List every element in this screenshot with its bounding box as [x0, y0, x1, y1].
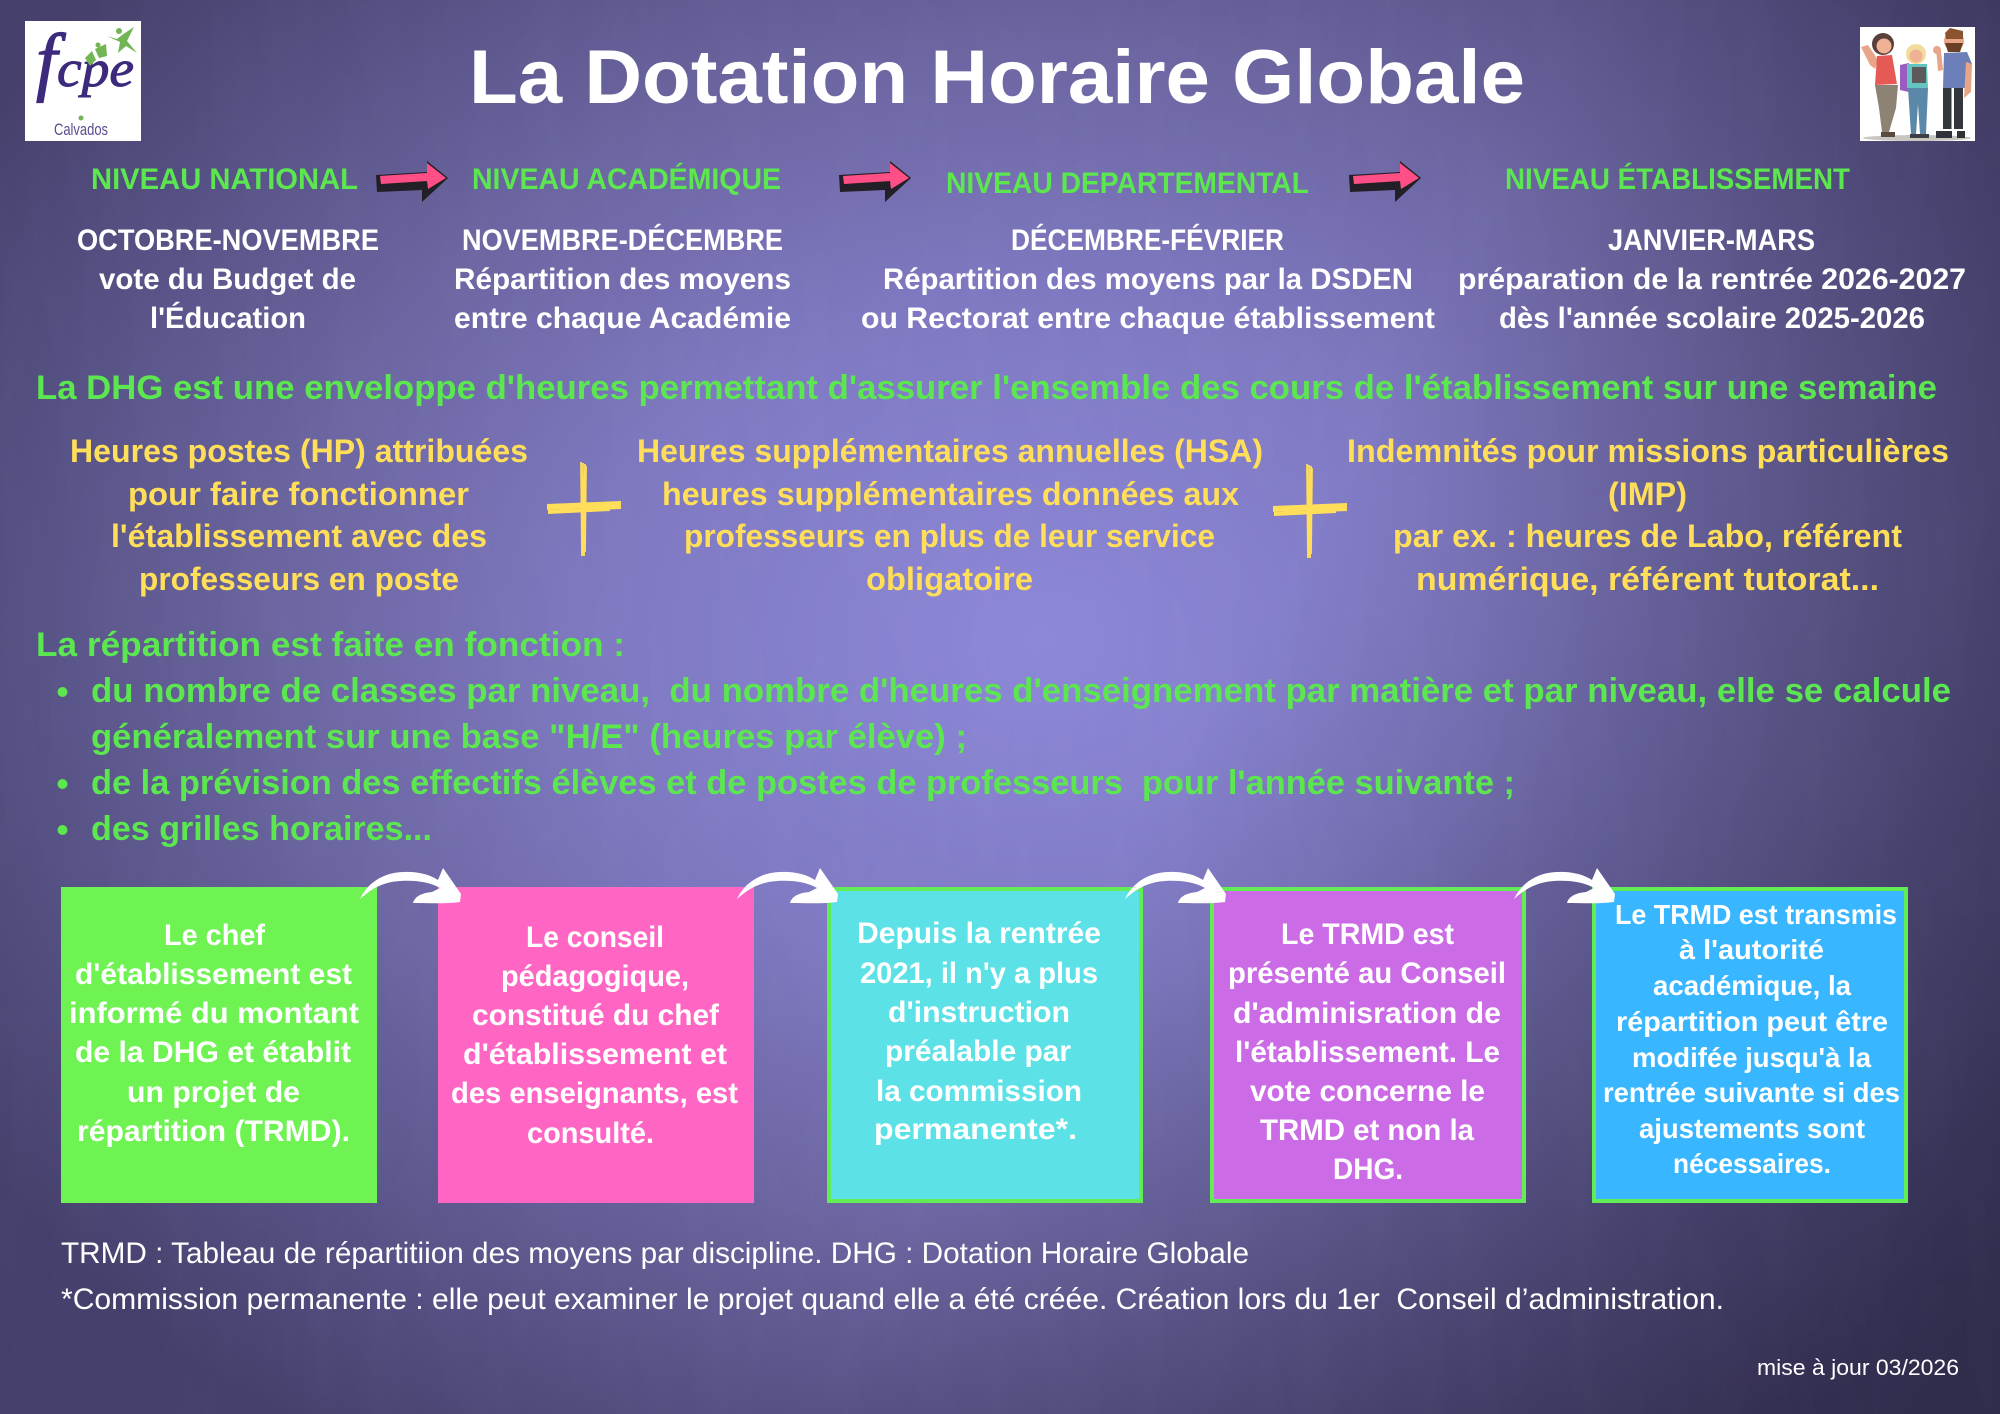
list heading: La répartition est faite en fonction :	[36, 626, 625, 664]
text block: national: OCTOBRE-NOVEMBRE	[77, 224, 379, 257]
panel: step 1 head of school: d'établissement est	[75, 958, 352, 991]
text block: departmental: Répartition des moyens par la DSDEN	[883, 263, 1413, 296]
bullet	[58, 779, 68, 789]
text block: heures postes: l'établissement avec des	[111, 518, 487, 554]
logo: fcpe Calvados	[25, 19, 141, 141]
panel: step 3 permanent commission: 2021, il n'y a plus	[860, 957, 1098, 990]
panel: timeline levels	[77, 161, 1966, 335]
panel: allocation criteria list	[36, 626, 1951, 848]
panel: step 4 administration council: TRMD et non la	[1260, 1114, 1474, 1147]
list item: forecast: de la prévision des effectifs élèves et de postes de professeurs pour l'année suivante ;	[91, 764, 1515, 802]
panel: step 3 permanent commission: d'instruction	[888, 996, 1070, 1029]
panel: step 1 head of school: informé du montant	[69, 997, 359, 1030]
text block: heures supplementaires	[637, 433, 1263, 597]
panel: step 3 permanent commission: Depuis la rentrée	[857, 917, 1101, 950]
text block: departmental: ou Rectorat entre chaque établissement	[861, 302, 1435, 335]
panel: step 4 administration council: DHG.	[1333, 1153, 1403, 1186]
list item: classes: généralement sur une base "H/E" (heures par élève) ;	[91, 718, 967, 756]
panel: step 2 pedagogical council: pédagogique,	[501, 960, 689, 993]
panel: step 2 pedagogical council: Le conseil	[526, 921, 664, 954]
panel: DHG components	[70, 433, 1949, 597]
text block: indemnites: (IMP)	[1608, 476, 1687, 512]
panel: step 3 permanent commission: permanente*.	[874, 1113, 1077, 1146]
panel: step 5 academic authority: ajustements sont	[1639, 1113, 1865, 1144]
panel: step 2 pedagogical council: consulté.	[527, 1117, 654, 1150]
logo: fcpe Calvados: cpe	[57, 41, 134, 98]
text block: national: vote du Budget de	[99, 263, 356, 296]
panel: step 1 head of school: Le chef	[164, 919, 266, 952]
text block: heures postes: pour faire fonctionner	[128, 476, 469, 512]
footnotes	[61, 1237, 1724, 1316]
text block: indemnites: numérique, référent tutorat...	[1416, 561, 1879, 597]
logo: fcpe Calvados: f	[36, 19, 66, 103]
panel: step 4 administration council: vote concerne le	[1250, 1075, 1485, 1108]
panel: step 2 pedagogical council	[438, 887, 754, 1203]
panel: step 5 academic authority: modifée jusqu'à la	[1632, 1042, 1871, 1073]
list item: classes	[91, 672, 1951, 756]
arrow: step 3 to 4	[1125, 868, 1226, 903]
footnotes: *Commission permanente : elle peut examiner le projet quand elle a été créée. Création lors du 1er Conseil d’administration.	[61, 1283, 1724, 1316]
list item: classes: du nombre de classes par niveau, du nombre d'heures d'enseignement par matière et par niveau, elle se calcule	[91, 672, 1951, 710]
panel: step 5 academic authority: à l'autorité	[1679, 934, 1824, 965]
panel: step 3 permanent commission: préalable par	[885, 1035, 1071, 1068]
panel: step 2 pedagogical council: des enseignants, est	[451, 1077, 738, 1110]
text block: academic: NOVEMBRE-DÉCEMBRE	[462, 223, 783, 257]
arrow: step 4 to 5	[1514, 868, 1615, 903]
panel: step 3 permanent commission: la commission	[876, 1075, 1082, 1108]
text block: heures postes: Heures postes (HP) attribuées	[70, 433, 528, 469]
panel: step 5 academic authority: nécessaires.	[1673, 1148, 1831, 1179]
text block: heures supplementaires: Heures supplémentaires annuelles (HSA)	[637, 433, 1263, 469]
text block: school: préparation de la rentrée 2026-2027	[1458, 263, 1966, 296]
text block: school	[1458, 224, 1966, 335]
text block: school: dès l'année scolaire 2025-2026	[1499, 302, 1925, 335]
update date: mise à jour 03/2026	[1757, 1355, 1959, 1380]
text block: indemnites: par ex. : heures de Labo, référent	[1393, 518, 1902, 554]
panel: step 3 permanent commission	[829, 889, 1141, 1201]
heading: niveau academique: NIVEAU ACADÉMIQUE	[472, 162, 781, 196]
heading: niveau etablissement: NIVEAU ÉTABLISSEMENT	[1505, 162, 1850, 196]
text block: school: JANVIER-MARS	[1608, 224, 1815, 257]
panel: step 5 academic authority: rentrée suivante si des	[1603, 1077, 1900, 1108]
list item: timetables: des grilles horaires...	[91, 810, 432, 848]
text block: departmental: DÉCEMBRE-FÉVRIER	[1011, 223, 1284, 257]
panel: step 4 administration council: d'adminisration de	[1233, 997, 1501, 1030]
logo: fcpe Calvados: Calvados	[54, 120, 108, 139]
footnotes: TRMD : Tableau de répartitiion des moyens par discipline. DHG : Dotation Horaire Globale	[61, 1237, 1249, 1270]
text block: heures supplementaires: obligatoire	[866, 561, 1033, 597]
panel: step 1 head of school: de la DHG et établit	[75, 1036, 351, 1069]
arrow: academic to departmental	[839, 161, 911, 202]
panel: step 5 academic authority: Le TRMD est transmis	[1615, 899, 1897, 930]
text block: departmental	[861, 223, 1435, 335]
definition line: La DHG est une enveloppe d'heures permettant d'assurer l'ensemble des cours de l'établissement sur une semaine	[36, 369, 1937, 407]
arrow: step 2 to 3	[737, 868, 838, 903]
panel: step 5 academic authority	[1594, 889, 1906, 1201]
text block: academic: entre chaque Académie	[454, 302, 791, 335]
text block: national: l'Éducation	[150, 301, 306, 335]
text block: academic	[454, 223, 791, 335]
panel: step 4 administration council	[1212, 889, 1524, 1201]
panel: step 4 administration council: l'établissement. Le	[1235, 1036, 1500, 1069]
heading: niveau national: NIVEAU NATIONAL	[91, 163, 358, 196]
bullet	[58, 825, 68, 835]
arrow: national to academic	[376, 161, 448, 202]
bullet	[58, 687, 68, 697]
panel: step 1 head of school: répartition (TRMD).	[77, 1115, 350, 1148]
panel: step 2 pedagogical council: constitué du chef	[472, 999, 720, 1032]
icon: chalk plus	[547, 462, 621, 556]
panel: step 2 pedagogical council: d'établissement et	[463, 1038, 727, 1071]
panel: step 4 administration council: Le TRMD est	[1281, 918, 1454, 951]
text block: academic: Répartition des moyens	[454, 263, 791, 296]
title: La Dotation Horaire Globale	[469, 35, 1525, 120]
text block: heures supplementaires: professeurs en plus de leur service	[684, 518, 1215, 554]
panel: step 5 academic authority: académique, la	[1653, 970, 1851, 1001]
panel: step 4 administration council: présenté au Conseil	[1228, 957, 1506, 990]
text block: indemnites	[1347, 433, 1949, 597]
heading: niveau departemental: NIVEAU DEPARTEMENTAL	[946, 167, 1309, 200]
panel: step 1 head of school	[61, 887, 377, 1203]
panel: step 5 academic authority: répartition peut être	[1616, 1006, 1888, 1037]
text block: national	[77, 224, 379, 335]
panel: step 1 head of school: un projet de	[127, 1076, 300, 1109]
icon: chalk plus	[1273, 464, 1347, 558]
text block: heures supplementaires: heures supplémentaires données aux	[662, 476, 1239, 512]
arrow: departmental to school	[1349, 161, 1421, 202]
text block: heures postes	[70, 433, 528, 597]
illustration: parents and student	[1860, 27, 1975, 141]
text block: heures postes: professeurs en poste	[139, 561, 459, 597]
text block: indemnites: Indemnités pour missions particulières	[1347, 433, 1949, 469]
arrow: step 1 to 2	[360, 868, 461, 903]
